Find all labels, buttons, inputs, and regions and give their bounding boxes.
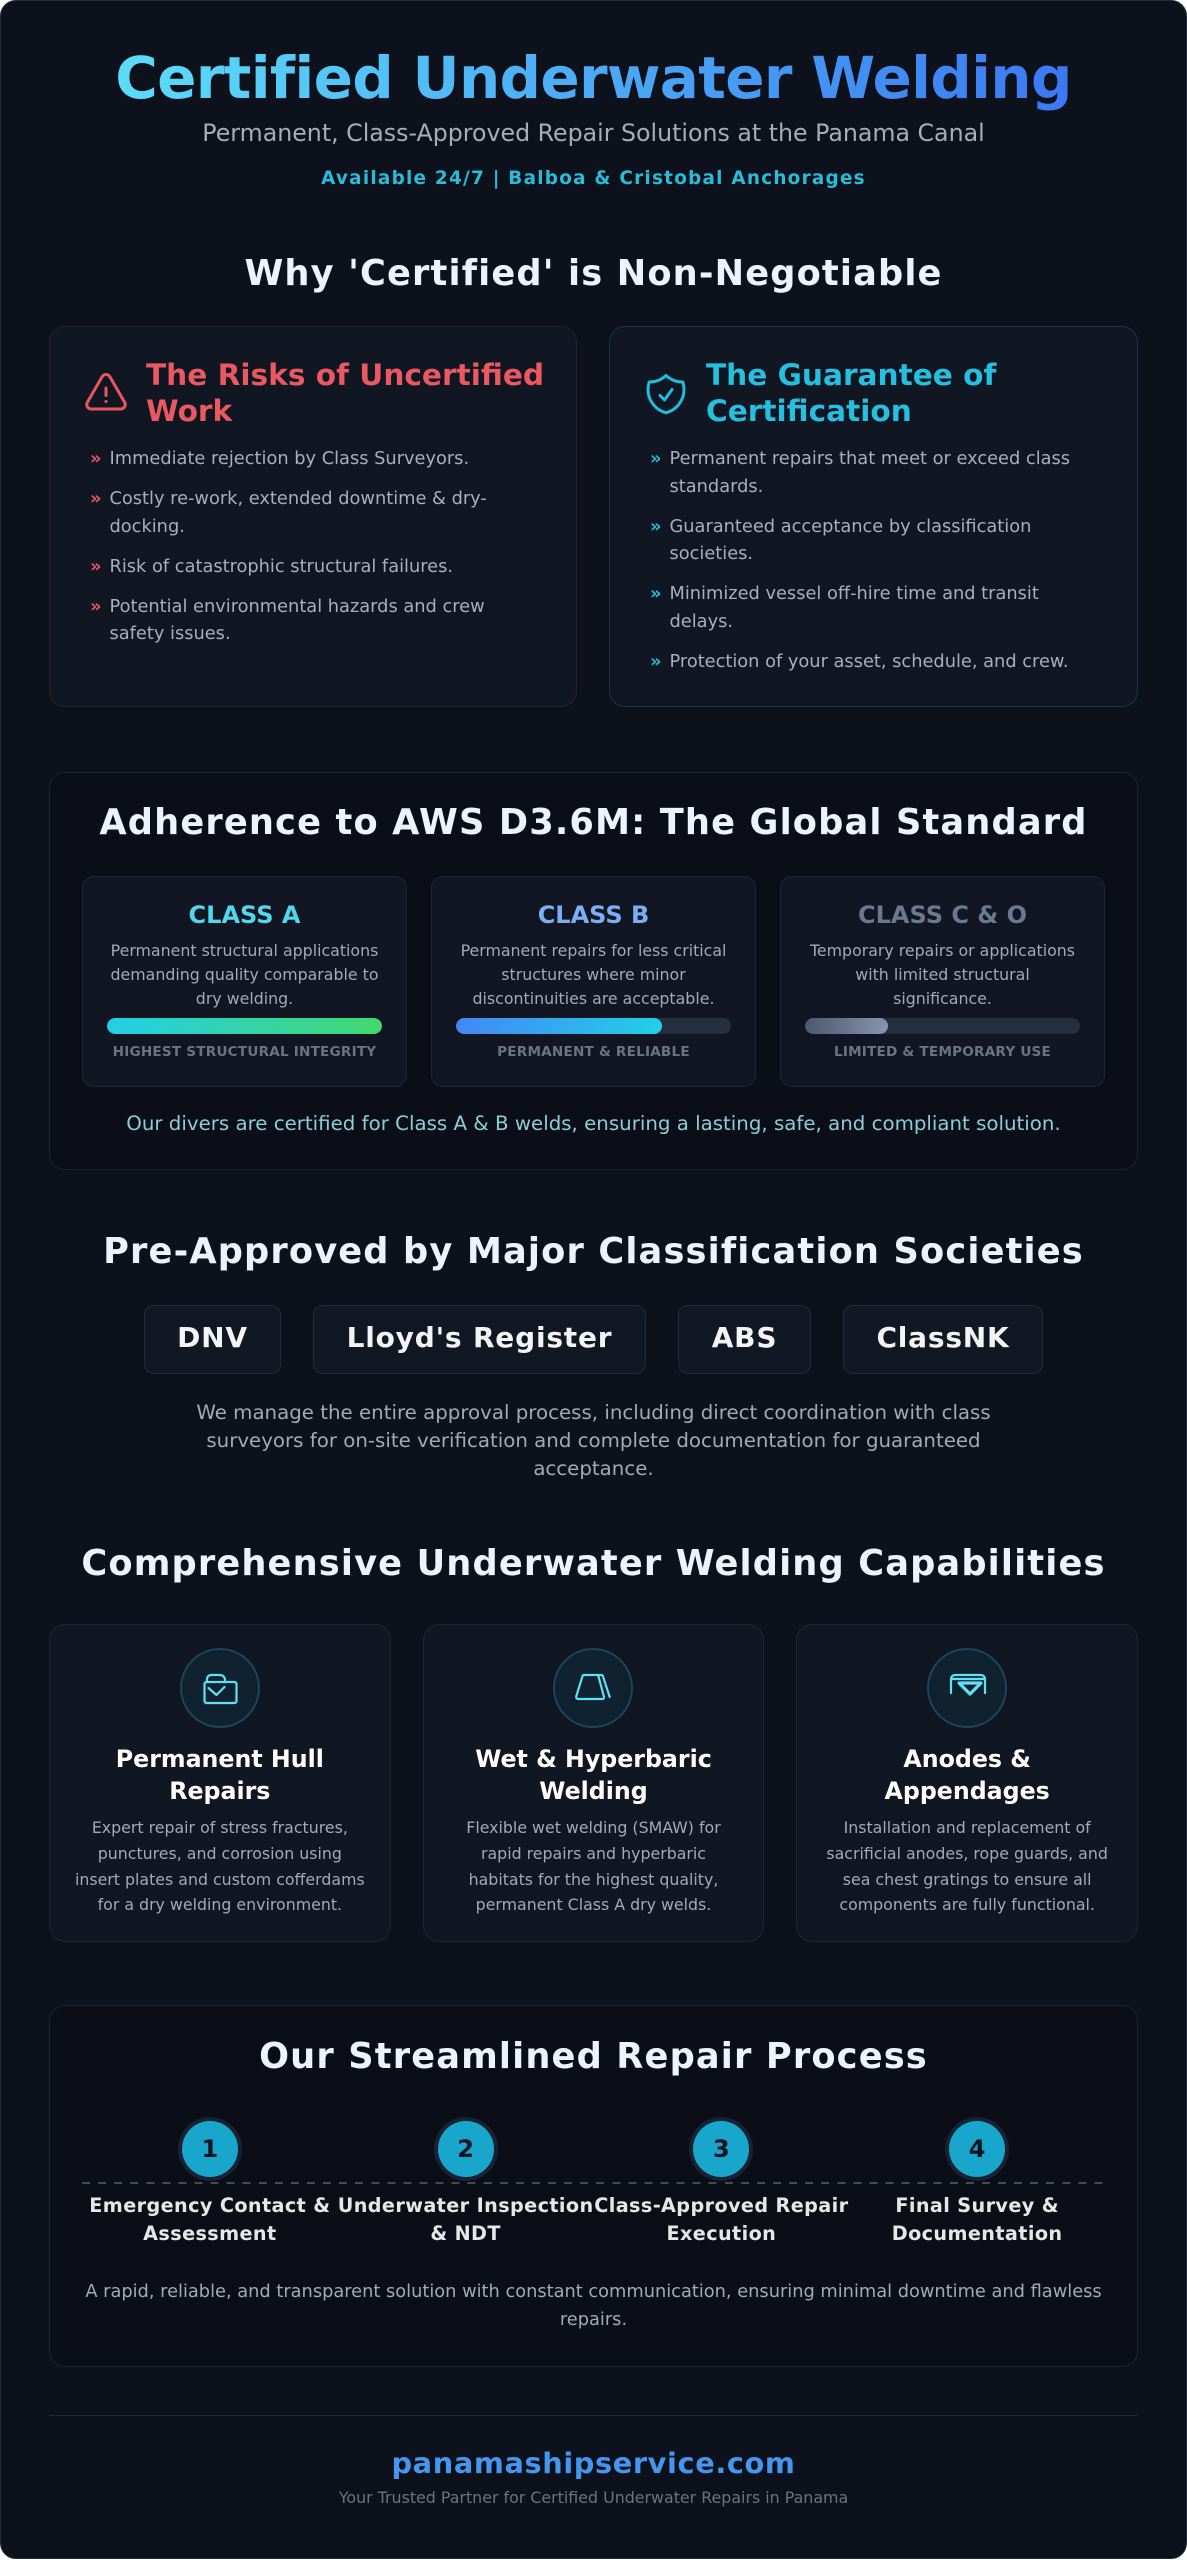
class A meter — [107, 1018, 382, 1034]
guarantee heading: The Guarantee of — [706, 358, 996, 392]
card: class A — [82, 876, 407, 1087]
welding description: rapid repairs and hyperbaric — [481, 1844, 706, 1863]
guarantee list: delays. — [670, 611, 733, 632]
anodes description: sacrificial anodes, rope guards, and — [826, 1844, 1108, 1863]
badge: ClassNK: ClassNK — [876, 1321, 1010, 1354]
risks list: docking. — [110, 516, 185, 537]
class C description — [810, 941, 1075, 1008]
hull repair title: Repairs — [169, 1777, 270, 1805]
step 3 number — [693, 2121, 749, 2177]
step 4 number: 4 — [969, 2135, 985, 2163]
class C meter — [805, 1018, 1080, 1034]
step 3 label: Class-Approved Repair — [594, 2194, 848, 2217]
guarantee list: Protection of your asset, schedule, and crew. — [670, 651, 1068, 672]
step 2 number — [438, 2121, 494, 2177]
hull repair title — [116, 1745, 324, 1805]
step 1 — [89, 2117, 330, 2245]
step 2 label: & NDT — [430, 2222, 501, 2245]
hull repair description: punctures, and corrosion using — [98, 1844, 342, 1863]
anodes description: components are fully functional. — [839, 1895, 1095, 1914]
process description: repairs. — [560, 2309, 627, 2330]
availability line: Available 24/7 | Balboa & Cristobal Anchorages — [321, 168, 866, 189]
risks list — [90, 448, 487, 644]
icon: welding habitat — [553, 1648, 633, 1728]
timeline dashed line — [82, 2182, 1105, 2184]
class B description: discontinuities are acceptable. — [473, 989, 714, 1008]
subtitle: Permanent, Class-Approved Repair Solutions at the Panama Canal — [202, 119, 985, 147]
risks list: Risk of catastrophic structural failures. — [110, 556, 453, 577]
guarantee list: » — [650, 448, 662, 469]
step 2 label — [338, 2194, 594, 2245]
anodes description — [826, 1818, 1108, 1914]
welding title — [475, 1745, 712, 1805]
heading: why certified: Why 'Certified' is Non-Negotiable — [244, 252, 943, 294]
societies heading: Pre-Approved by Major Classification Societies — [103, 1231, 1084, 1272]
class A description — [110, 941, 378, 1008]
guarantee list: Guaranteed acceptance by classification — [670, 516, 1031, 537]
risks list: safety issues. — [110, 623, 231, 644]
welding title: Wet & Hyperbaric — [475, 1745, 712, 1773]
hull repair description: for a dry welding environment. — [98, 1895, 342, 1914]
guarantee list: » — [650, 583, 662, 604]
societies description: acceptance. — [533, 1457, 654, 1480]
badge: ClassNK — [843, 1305, 1043, 1374]
step 4 — [892, 2117, 1062, 2245]
hull repair title: Permanent Hull — [116, 1745, 324, 1773]
risks list: Costly re-work, extended downtime & dry- — [110, 488, 487, 509]
icon: shield check — [646, 374, 686, 414]
anodes title: Appendages — [885, 1777, 1050, 1805]
step 1 label: Assessment — [143, 2222, 277, 2245]
badge: DNV — [144, 1305, 281, 1374]
step 2 number: 2 — [457, 2135, 474, 2163]
class C description: significance. — [893, 989, 992, 1008]
risks heading: The Risks of Uncertified — [146, 358, 544, 392]
societies description: surveyors for on-site verification and complete documentation for guaranteed — [206, 1429, 981, 1452]
class B description: Permanent repairs for less critical — [461, 941, 726, 960]
welding title: Welding — [539, 1777, 648, 1805]
anodes description: Installation and replacement of — [844, 1818, 1091, 1837]
guarantee list — [650, 448, 1070, 672]
risks list: » — [90, 556, 102, 577]
badge: Lloyd's Register — [313, 1305, 646, 1374]
class A label: HIGHEST STRUCTURAL INTEGRITY — [113, 1044, 376, 1060]
tagline: Your Trusted Partner for Certified Underwater Repairs in Panama — [339, 2488, 848, 2507]
step 1 number: 1 — [202, 2135, 218, 2163]
step 3 label: Execution — [666, 2222, 776, 2245]
class A description: Permanent structural applications — [111, 941, 378, 960]
panel: AWS D3.6M standard — [49, 772, 1138, 1170]
heading: capabilities: Comprehensive Underwater Welding Capabilities — [81, 1543, 1106, 1584]
website: panamashipservice.com — [391, 2446, 796, 2480]
step 4 label — [892, 2194, 1062, 2245]
header — [115, 44, 1072, 189]
risks list: » — [90, 488, 102, 509]
panel: risks of uncertified work — [49, 326, 577, 707]
card: wet and hyperbaric welding — [423, 1624, 764, 1942]
icon: anodes — [927, 1648, 1007, 1728]
anodes title: Anodes & — [903, 1745, 1031, 1773]
badge: ABS: ABS — [712, 1321, 777, 1354]
hull repair description: insert plates and custom cofferdams — [75, 1870, 365, 1888]
class C description: Temporary repairs or applications — [810, 941, 1075, 960]
risks list: » — [90, 448, 102, 469]
anodes description: sea chest gratings to ensure all — [843, 1870, 1092, 1888]
guarantee list: societies. — [670, 543, 753, 564]
step 1 label — [89, 2194, 330, 2245]
welding description: Flexible wet welding (SMAW) for — [466, 1818, 721, 1837]
icon: hull repair — [180, 1648, 260, 1728]
guarantee heading: Certification — [706, 394, 912, 428]
card: anodes and appendages — [796, 1624, 1138, 1942]
class A name: CLASS A — [189, 901, 300, 929]
risks list: Immediate rejection by Class Surveyors. — [110, 448, 469, 469]
card: class B — [431, 876, 756, 1087]
step 1 number — [182, 2121, 238, 2177]
badge: Lloyd's Register: Lloyd's Register — [347, 1321, 612, 1354]
process heading: Our Streamlined Repair Process — [259, 2036, 928, 2077]
guarantee list: standards. — [670, 476, 763, 497]
hull repair description — [75, 1818, 365, 1914]
certification note: Our divers are certified for Class A & B welds, ensuring a lasting, safe, and compliant solution. — [126, 1112, 1061, 1135]
class B label: PERMANENT & RELIABLE — [497, 1044, 690, 1060]
guarantee list: Permanent repairs that meet or exceed class — [670, 448, 1070, 469]
class C description: with limited structural — [855, 965, 1030, 984]
risks heading: Work — [146, 394, 232, 428]
step 1 label: Emergency Contact & — [89, 2194, 330, 2217]
societies description — [196, 1401, 991, 1480]
welding description: permanent Class A dry welds. — [476, 1895, 711, 1914]
hull repair description: Expert repair of stress fractures, — [92, 1818, 348, 1837]
guarantee list: » — [650, 651, 662, 672]
title: Certified Underwater Welding — [115, 44, 1072, 112]
class A description: demanding quality comparable to — [110, 965, 378, 984]
risks list: Potential environmental hazards and crew — [110, 596, 485, 617]
step 4 number — [949, 2121, 1005, 2177]
welding description — [466, 1818, 721, 1914]
class C name: CLASS C & O — [858, 901, 1027, 929]
panel: repair process — [49, 2005, 1138, 2366]
step 2 label: Underwater Inspection — [338, 2194, 594, 2217]
step 3 — [594, 2117, 848, 2245]
badge: DNV: DNV — [177, 1321, 248, 1354]
step 3 label — [594, 2194, 848, 2245]
step 4 label: Final Survey & — [895, 2194, 1059, 2217]
class B name: CLASS B — [538, 901, 649, 929]
societies description: We manage the entire approval process, including direct coordination with class — [196, 1401, 991, 1424]
card: class C and O — [780, 876, 1105, 1087]
AWS heading: Adherence to AWS D3.6M: The Global Standard — [99, 802, 1088, 843]
panel: guarantee of certification — [609, 326, 1138, 707]
badge: ABS — [678, 1305, 811, 1374]
card: permanent hull repairs — [49, 1624, 391, 1942]
step 4 label: Documentation — [892, 2222, 1062, 2245]
section: classification societies — [103, 1231, 1084, 1480]
footer — [339, 2446, 848, 2507]
class A description: dry welding. — [196, 989, 293, 1008]
step 3 number: 3 — [713, 2135, 730, 2163]
guarantee list: Minimized vessel off-hire time and transit — [670, 583, 1039, 604]
process description: A rapid, reliable, and transparent solution with constant communication, ensuring minimal downtime and flawless — [85, 2281, 1102, 2302]
guarantee heading — [706, 358, 997, 428]
risks heading — [146, 358, 544, 428]
welding description: habitats for the highest quality, — [469, 1870, 718, 1888]
risks list: » — [90, 596, 102, 617]
guarantee list: » — [650, 516, 662, 537]
class B description: structures where minor — [501, 965, 686, 984]
anodes title — [884, 1745, 1050, 1805]
class B meter — [456, 1018, 731, 1034]
step 2 — [338, 2117, 594, 2245]
icon: warning triangle — [85, 373, 127, 410]
class B description — [461, 941, 726, 1008]
class C label: LIMITED & TEMPORARY USE — [834, 1044, 1051, 1060]
process description — [85, 2281, 1102, 2330]
